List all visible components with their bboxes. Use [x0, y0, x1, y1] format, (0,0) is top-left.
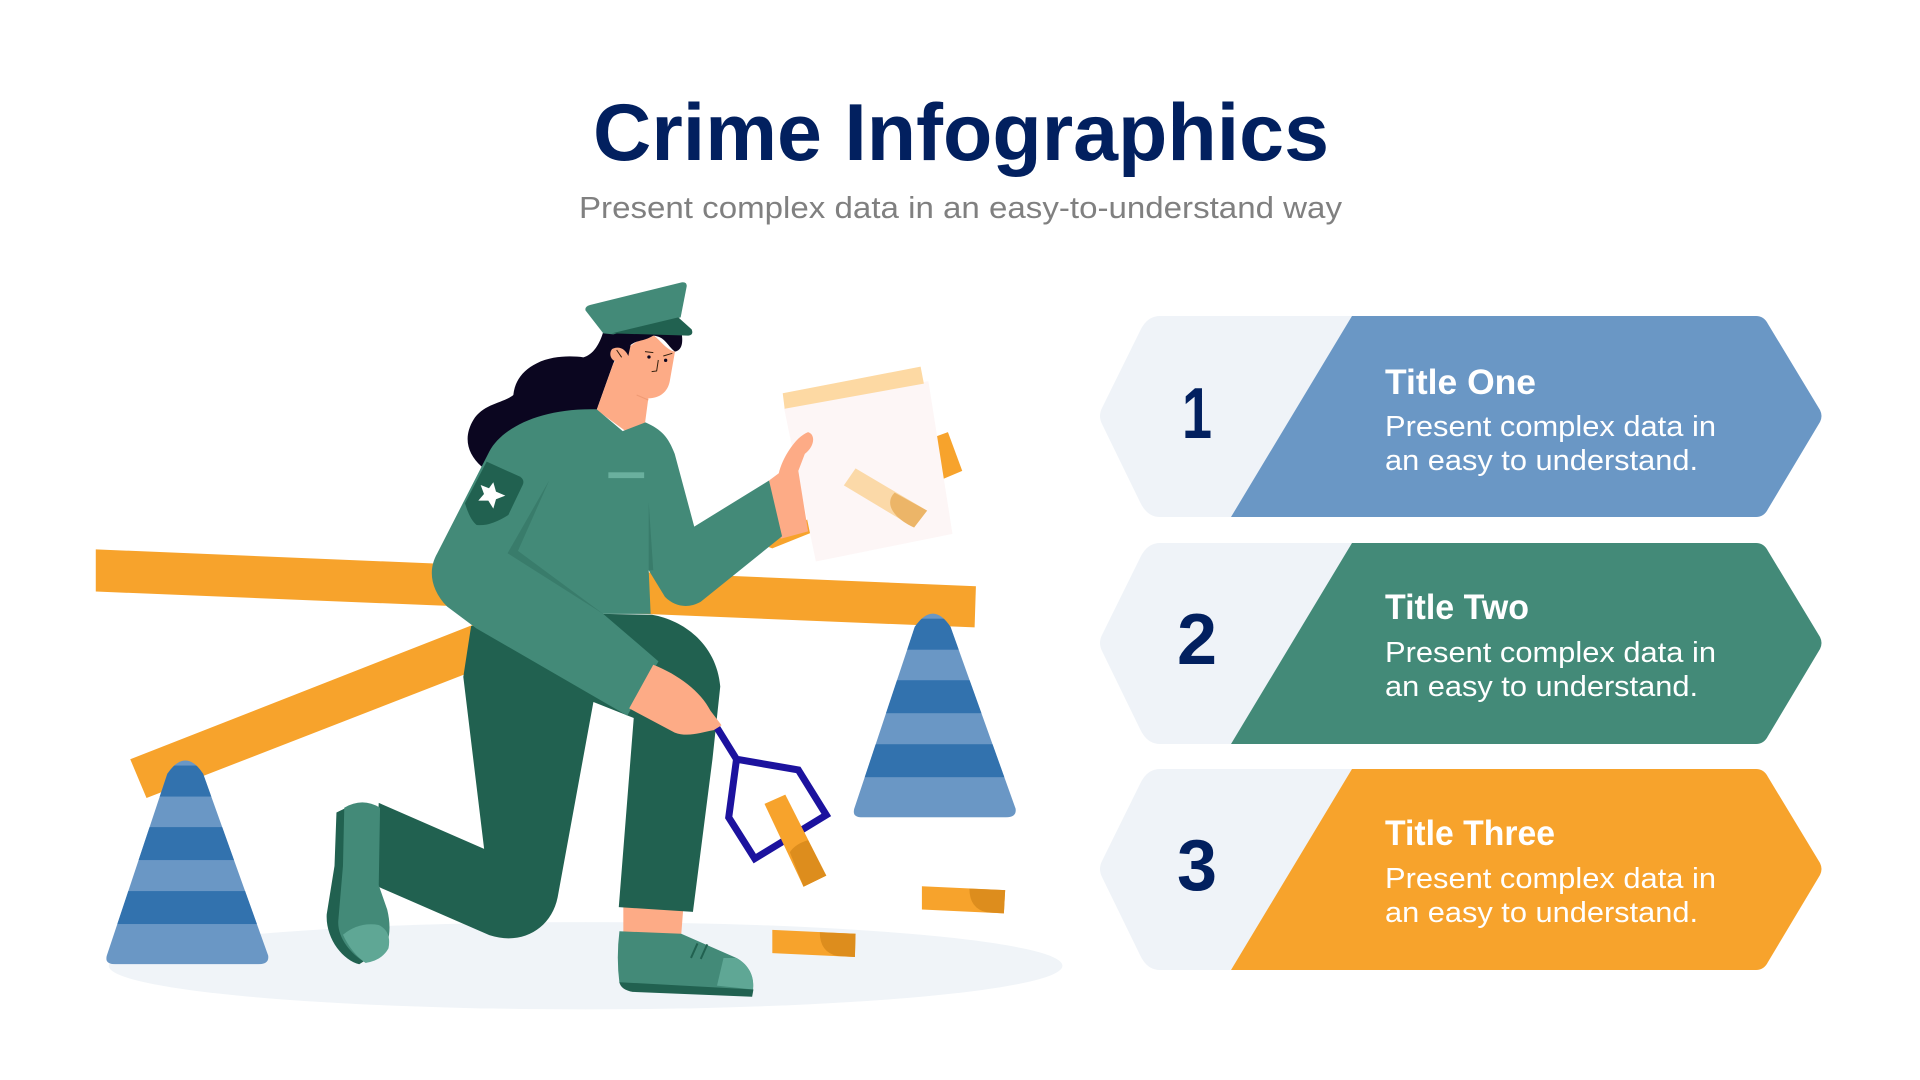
uniform upper body: [432, 409, 782, 735]
cone: left: [106, 760, 268, 964]
shoe: back: [327, 802, 390, 964]
chin shading: [637, 395, 648, 400]
cap brim: [612, 317, 692, 336]
card 3: [1100, 769, 1822, 970]
face and neck: [597, 335, 675, 431]
cap crown: [585, 282, 687, 334]
evidence: floor piece right: [922, 886, 1005, 913]
card 1 heading: Title One: [1385, 363, 1536, 402]
fringe: [607, 333, 682, 356]
card 1 colour panel: [1231, 316, 1822, 517]
cap and badge: [465, 282, 692, 525]
ground shadow: [109, 922, 1062, 1009]
card 3 body: Present complex data in: [1385, 863, 1716, 895]
cone: right: [854, 614, 1016, 818]
hand: lower: [629, 665, 722, 735]
evidence on paper: [844, 468, 927, 528]
paper header strip: [783, 367, 924, 409]
card 2 body: Present complex data in: [1385, 637, 1716, 669]
pocket line: [608, 472, 644, 478]
card 1 number: 1: [1182, 374, 1212, 454]
subtitle: Present complex data in an easy-to-understand way: [579, 190, 1343, 225]
tape: horizontal: [96, 549, 976, 627]
evidence: held in tongs: [764, 795, 826, 887]
card 2 number: 2: [1177, 600, 1217, 680]
sleeve fold: [508, 481, 603, 614]
card 3 heading: Title Three: [1385, 814, 1555, 853]
card 3 colour panel: [1231, 769, 1822, 970]
facial features: [617, 350, 672, 372]
paper: [783, 367, 952, 561]
torso and sleeves: [432, 409, 782, 716]
card 2 number tab: [1100, 543, 1355, 744]
chest fold: [649, 502, 653, 570]
card 1 body: Present complex data in: [1385, 411, 1716, 443]
hand: upper: [769, 432, 813, 539]
tape: behind paper: [935, 432, 962, 479]
card 2 colour panel: [1231, 543, 1822, 744]
badge: [465, 462, 523, 525]
card 2 heading: Title Two: [1385, 588, 1529, 627]
hair: [468, 332, 682, 467]
ear: [610, 346, 626, 362]
card 3 number tab: [1100, 769, 1355, 970]
tape: diagonal: [130, 624, 489, 798]
card 1 body: an easy to understand.: [1385, 445, 1698, 477]
card 3 body: an easy to understand.: [1385, 897, 1698, 929]
tongs: [717, 728, 826, 859]
tape: behind arm: [766, 517, 815, 548]
evidence: floor piece left: [772, 930, 856, 957]
card 1: [1100, 316, 1822, 517]
ankle: [623, 905, 683, 935]
illustration: officer collecting evidence: [96, 367, 1062, 1009]
shoe: front: [618, 931, 753, 997]
card 1 number tab: [1100, 316, 1355, 517]
eyes: [647, 355, 667, 362]
card 2: [1100, 543, 1822, 744]
card 2 body: an easy to understand.: [1385, 671, 1698, 703]
title: Crime Infographics: [593, 88, 1329, 178]
card 3 number: 3: [1177, 826, 1217, 906]
trousers: [375, 614, 720, 938]
star: [478, 482, 505, 509]
